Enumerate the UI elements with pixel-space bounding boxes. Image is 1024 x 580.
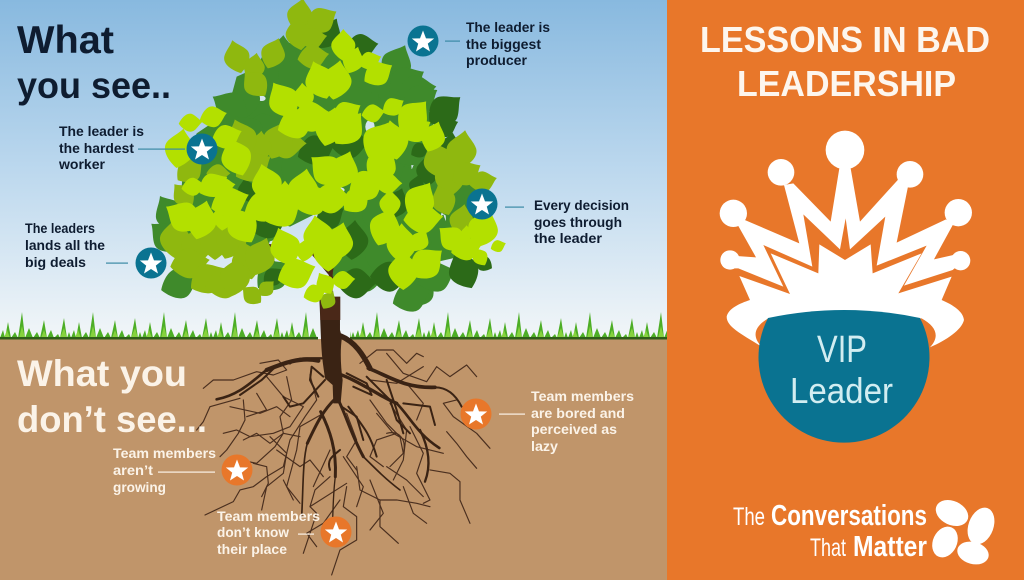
- logo: The Conversations That Matter: That: [810, 534, 846, 562]
- callout: hardest worker: [58, 123, 218, 172]
- icon: head with VIP Leader: [758, 310, 930, 443]
- grass strip: [0, 308, 667, 340]
- icon: petals: [927, 495, 999, 568]
- callout: every decision: goes through: [534, 214, 622, 230]
- callout: don't know their place: Team members: [217, 508, 320, 524]
- heading: what you don't see: [17, 353, 207, 440]
- callout: biggest producer: the biggest: [466, 36, 541, 52]
- callout: bored and lazy: lazy: [531, 438, 558, 454]
- logo: The Conversations That Matter: The: [733, 503, 765, 531]
- heading: what you see: [17, 19, 171, 106]
- title: LEADERSHIP: [737, 63, 956, 104]
- sky gaps: [234, 96, 446, 230]
- callout: bored and lazy: are bored and: [531, 405, 625, 421]
- callout: biggest producer: [408, 19, 550, 68]
- panel: soil background: [0, 339, 667, 580]
- callout: every decision: Every decision: [534, 197, 629, 213]
- callout: every decision: the leader: [534, 230, 603, 246]
- trunk: [319, 298, 343, 403]
- callout: biggest producer: The leader is: [466, 19, 550, 35]
- heading: what you see: What: [17, 19, 114, 62]
- callout: every decision: [466, 188, 629, 246]
- callout: big deals: big deals: [25, 254, 86, 270]
- callout: don't know their place: [217, 508, 352, 557]
- callout: bored and lazy: [460, 388, 634, 454]
- callout: aren't growing: [113, 445, 252, 495]
- callout: hardest worker: The leader is: [59, 123, 144, 139]
- callout: don't know their place: don’t know: [217, 524, 289, 540]
- olive leaves: [160, 0, 500, 312]
- panel: orange sidebar: [667, 0, 1024, 580]
- heading: what you see: you see..: [17, 65, 171, 106]
- callout: aren't growing: Team members: [113, 445, 216, 461]
- branches: [263, 213, 377, 320]
- logo: The Conversations That Matter: Conversations: [771, 500, 927, 532]
- callout: big deals: lands all the: [25, 237, 105, 253]
- callout: aren't growing: growing: [113, 479, 166, 495]
- icon: crown: [720, 131, 972, 347]
- roots: [197, 298, 490, 575]
- light leaves: [158, 29, 508, 306]
- dark leaves: [142, 33, 470, 318]
- title: [700, 19, 990, 104]
- panel: sky background: [0, 0, 667, 340]
- callout: bored and lazy: Team members: [531, 388, 634, 404]
- heading: what you don't see: don’t see...: [17, 399, 207, 440]
- heading: what you don't see: What you: [17, 353, 187, 394]
- callout: aren't growing: aren’t: [113, 462, 153, 478]
- callout: hardest worker: the hardest: [59, 140, 134, 156]
- callout: hardest worker: worker: [58, 156, 106, 172]
- callout: bored and lazy: perceived as: [531, 421, 617, 437]
- callout: don't know their place: their place: [217, 541, 287, 557]
- icon: head with VIP Leader: VIP: [817, 329, 867, 371]
- callout: big deals: The leaders: [25, 220, 95, 236]
- darker leaves: [236, 12, 496, 298]
- callout: biggest producer: producer: [466, 52, 528, 68]
- icon: head with VIP Leader: Leader: [790, 370, 893, 411]
- logo: The Conversations That Matter: [733, 495, 999, 568]
- tree: [142, 0, 508, 320]
- title: LESSONS IN BAD: [700, 19, 990, 60]
- callout: big deals: [25, 220, 166, 278]
- canopy base: [180, 37, 483, 283]
- logo: The Conversations That Matter: Matter: [853, 531, 927, 563]
